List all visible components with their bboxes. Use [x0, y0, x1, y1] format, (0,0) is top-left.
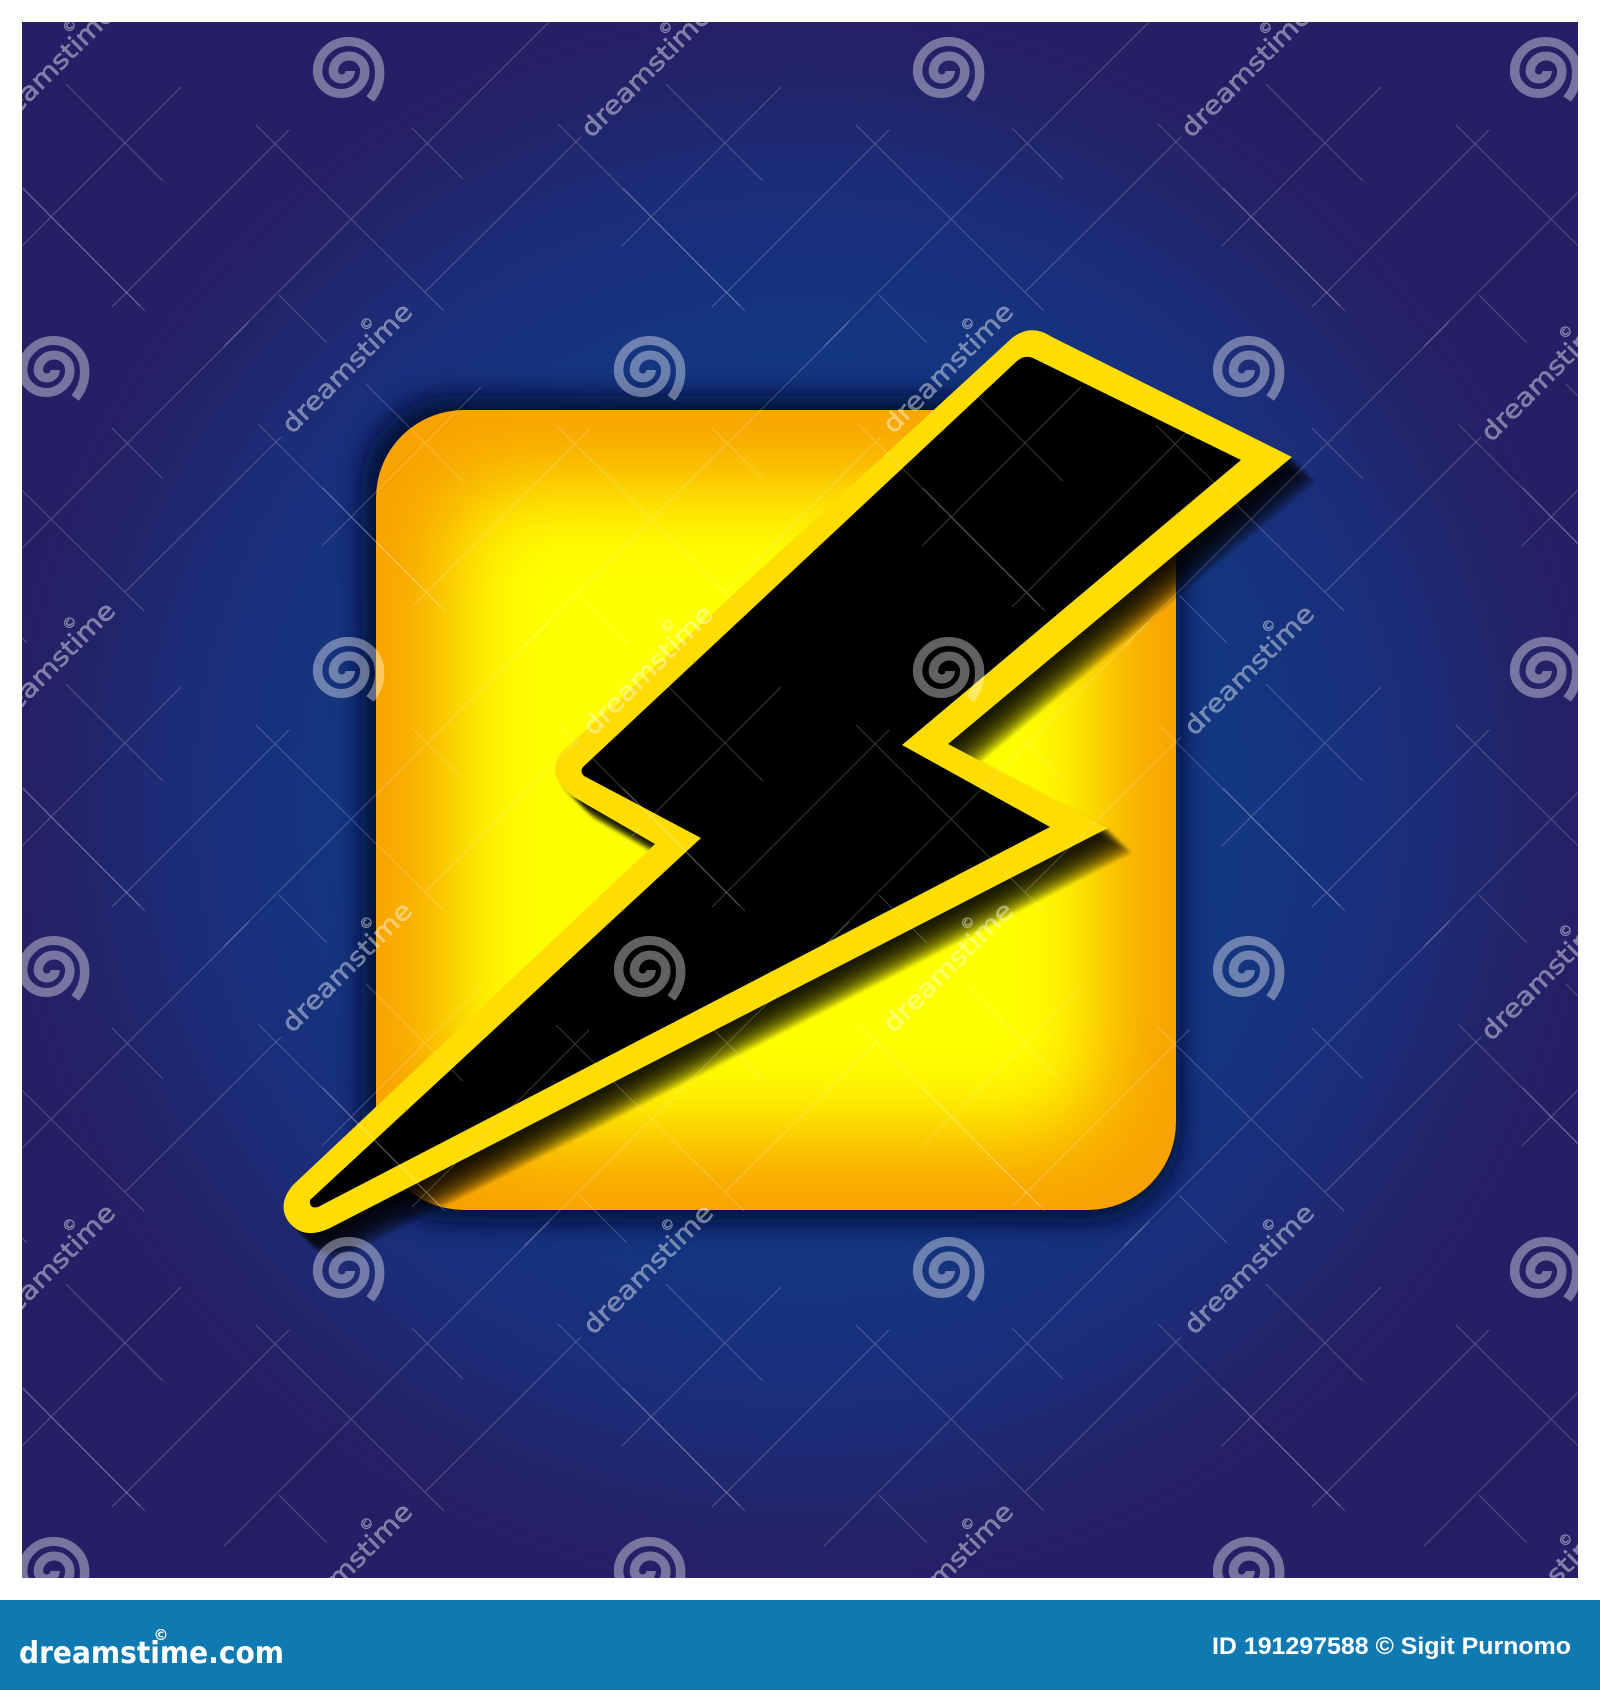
- watermark: dreamstime text: dreamstime: [575, 1, 717, 143]
- watermark: dreamstime text: dreamstime: [276, 896, 418, 1038]
- footer image id credit: ID 191297588 © Sigit Purnomo: [1212, 1633, 1571, 1660]
- watermark: dreamstime text: ©: [958, 314, 979, 335]
- watermark: dreamstime text: dreamstime: [877, 1497, 1019, 1639]
- watermark: dreamstime text: dreamstime: [577, 1198, 719, 1340]
- watermark: dreamstime text: ©: [357, 913, 378, 934]
- watermark: dreamstime text: ©: [658, 1215, 679, 1236]
- watermark: dreamstime text: ©: [658, 616, 679, 637]
- watermark: dreamstime text: dreamstime: [877, 297, 1019, 439]
- bolt black core: [310, 357, 1241, 1207]
- watermark: dreamstime text: ©: [1256, 18, 1277, 39]
- watermark: dreamstime text: dreamstime: [1178, 1198, 1320, 1340]
- watermark: dreamstime text: ©: [1259, 1215, 1280, 1236]
- watermark: dreamstime text: dreamstime: [276, 1497, 418, 1639]
- watermark: dreamstime text: ©: [1556, 1530, 1577, 1551]
- watermark: dreamstime text: ©: [357, 1514, 378, 1535]
- watermark: dreamstime text: dreamstime: [1475, 305, 1600, 447]
- watermark: dreamstime text: ©: [357, 314, 378, 335]
- watermark: dreamstime text: ©: [60, 613, 81, 634]
- bolt yellow outline: [284, 330, 1292, 1233]
- watermark: dreamstime text: dreamstime: [577, 599, 719, 741]
- watermark: dreamstime text: ©: [1556, 921, 1577, 942]
- watermark: dreamstime text: dreamstime: [1475, 904, 1600, 1046]
- icon: lightning bolt: [284, 330, 1316, 1257]
- watermark: dreamstime text: dreamstime: [1175, 1, 1317, 143]
- watermark: dreamstime text: ©: [1259, 616, 1280, 637]
- watermark: dreamstime text: dreamstime: [1475, 1513, 1600, 1655]
- icon shadow: square dark glow: [362, 396, 1180, 1222]
- watermark: dreamstime text: ©: [60, 16, 81, 37]
- watermark: dreamstime text: ©: [656, 18, 677, 39]
- watermark: dreamstime text: dreamstime: [276, 297, 418, 439]
- bolt extruded shadow: [287, 333, 1316, 1257]
- watermark: dreamstime text: ©: [60, 1215, 81, 1236]
- panel: rounded yellow square: [376, 410, 1176, 1210]
- watermark: dreamstime text: ©: [1556, 322, 1577, 343]
- footer bar: [0, 1600, 1600, 1690]
- watermark: dreamstime text: dreamstime: [1178, 599, 1320, 741]
- watermark: dreamstime text: ©: [958, 913, 979, 934]
- footer logo mark: ©: [154, 1626, 168, 1644]
- watermark: dreamstime text: dreamstime: [877, 896, 1019, 1038]
- watermark: dreamstime text: ©: [958, 1514, 979, 1535]
- footer logo text: dreamstime.com: [19, 1636, 284, 1671]
